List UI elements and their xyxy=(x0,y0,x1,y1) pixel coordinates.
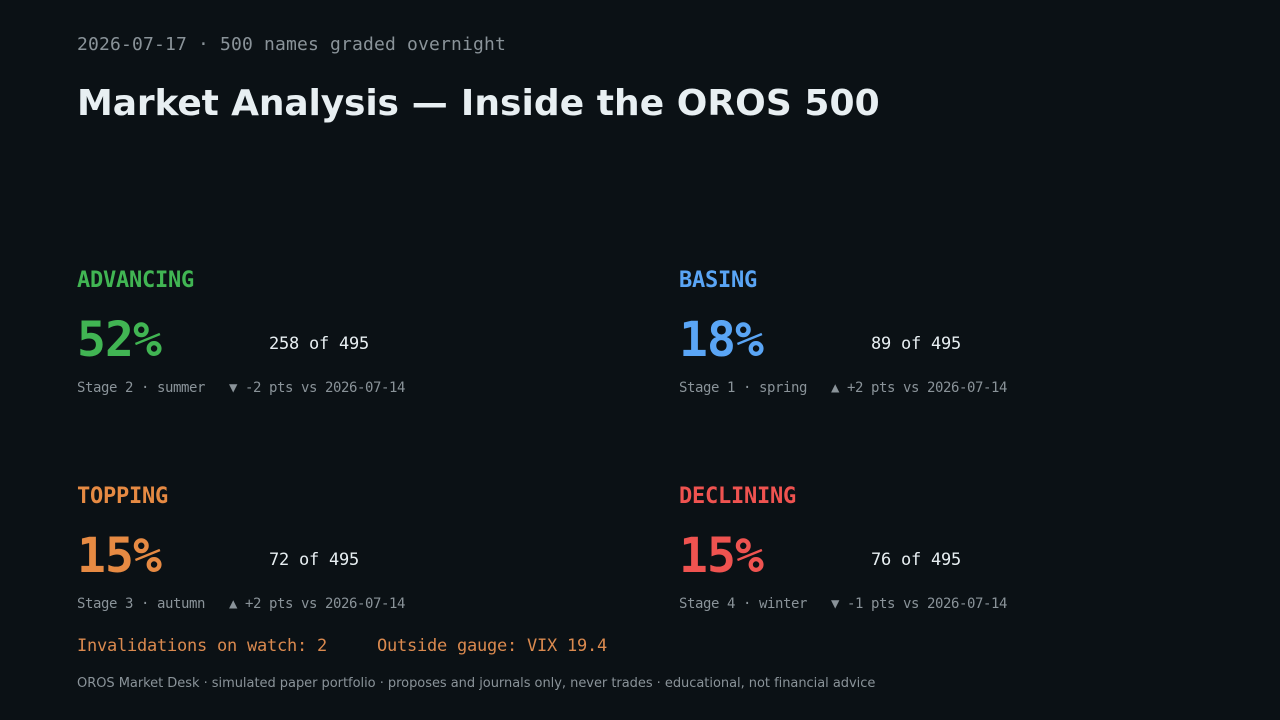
basing count: 89 of 495 xyxy=(871,334,961,354)
declining percentage: 15% xyxy=(679,528,763,584)
declining stage and change: Stage 4 · winter ▼ -1 pts vs 2026-07-14 xyxy=(679,596,1007,612)
topping stage and change: Stage 3 · autumn ▲ +2 pts vs 2026-07-14 xyxy=(77,596,405,612)
panel: advancing xyxy=(77,268,405,396)
panel: declining xyxy=(679,484,1007,612)
basing stage and change: Stage 1 · spring ▲ +2 pts vs 2026-07-14 xyxy=(679,380,1007,396)
basing heading: BASING xyxy=(679,268,757,293)
date line: 2026-07-17 · 500 names graded overnight xyxy=(77,34,506,55)
advancing percentage: 52% xyxy=(77,312,161,368)
topping percentage: 15% xyxy=(77,528,161,584)
basing percentage: 18% xyxy=(679,312,763,368)
advancing heading: ADVANCING xyxy=(77,268,194,293)
topping heading: TOPPING xyxy=(77,484,168,509)
panel: basing xyxy=(679,268,1007,396)
declining heading: DECLINING xyxy=(679,484,796,509)
declining count: 76 of 495 xyxy=(871,550,961,570)
watch line: Invalidations on watch: 2 Outside gauge: VIX 19.4 xyxy=(77,636,607,656)
topping count: 72 of 495 xyxy=(269,550,359,570)
advancing stage and change: Stage 2 · summer ▼ -2 pts vs 2026-07-14 xyxy=(77,380,405,396)
advancing count: 258 of 495 xyxy=(269,334,369,354)
title: Market Analysis — Inside the OROS 500 xyxy=(77,83,880,124)
panel: topping xyxy=(77,484,405,612)
footer disclaimer: OROS Market Desk · simulated paper portfolio · proposes and journals only, never trades · educational, not financial advice xyxy=(77,676,875,691)
